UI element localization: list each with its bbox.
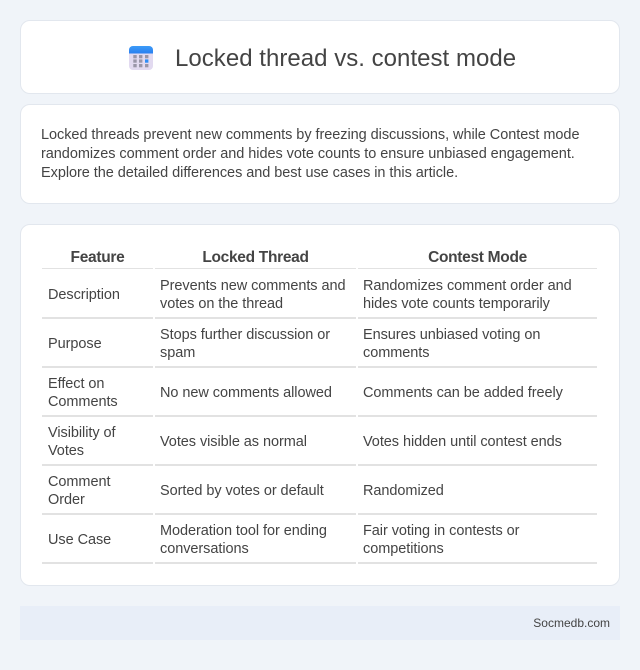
- panel: comparison table: [20, 224, 620, 586]
- table header: Feature: [71, 249, 124, 266]
- footer text: Socmedb.com: [533, 616, 610, 630]
- text: introduction: randomizes comment order and hides vote counts to ensure unbiased engagement.: [41, 146, 575, 162]
- text: introduction: [41, 127, 579, 181]
- row: visibility of votes: Votes: [48, 443, 84, 459]
- title: Locked thread vs. contest mode: [175, 45, 516, 72]
- row: purpose: Purpose: [48, 336, 102, 352]
- row: visibility of votes: [42, 425, 597, 466]
- row: effect on comments: Comments: [48, 394, 118, 410]
- row: description: Randomizes comment order and: [363, 278, 572, 294]
- footer bar: [20, 606, 620, 640]
- row: effect on comments: Comments can be added freely: [363, 385, 563, 401]
- text: introduction: Locked threads prevent new comments by freezing discussions, while Contest mode: [41, 127, 579, 143]
- row: effect on comments: [42, 376, 597, 417]
- row: use case: competitions: [363, 541, 444, 557]
- row: purpose: [42, 327, 597, 368]
- row: purpose: Stops further discussion or: [160, 327, 330, 343]
- row: purpose: Ensures unbiased voting on: [363, 327, 540, 343]
- row: description: Prevents new comments and: [160, 278, 345, 294]
- panel: introduction: [20, 104, 620, 204]
- icon: calendar: [129, 46, 153, 70]
- row: comment order: Randomized: [363, 483, 444, 499]
- row: description: hides vote counts temporarily: [363, 296, 550, 312]
- row: use case: [42, 523, 597, 564]
- row: effect on comments: No new comments allowed: [160, 385, 332, 401]
- row: effect on comments: Effect on: [48, 376, 104, 392]
- row: comment order: Order: [48, 492, 85, 508]
- row: description: [42, 278, 597, 319]
- row: visibility of votes: Votes visible as normal: [160, 434, 307, 450]
- row: description: Description: [48, 287, 120, 303]
- row: visibility of votes: Visibility of: [48, 425, 115, 441]
- row: visibility of votes: Votes hidden until contest ends: [363, 434, 562, 450]
- row: comment order: [42, 474, 597, 515]
- row: purpose: spam: [160, 345, 195, 361]
- text: introduction: Explore the detailed differences and best use cases in this article.: [41, 165, 458, 181]
- table header: [42, 249, 597, 269]
- row: use case: Use Case: [48, 532, 111, 548]
- row: comment order: Comment: [48, 474, 110, 490]
- row: use case: Moderation tool for ending: [160, 523, 327, 539]
- row: purpose: comments: [363, 345, 429, 361]
- row: use case: conversations: [160, 541, 249, 557]
- panel: title card: [20, 20, 620, 94]
- table header: Locked Thread: [202, 249, 309, 266]
- row: comment order: Sorted by votes or default: [160, 483, 324, 499]
- table header: Contest Mode: [428, 249, 527, 266]
- row: description: votes on the thread: [160, 296, 283, 312]
- row: use case: Fair voting in contests or: [363, 523, 519, 539]
